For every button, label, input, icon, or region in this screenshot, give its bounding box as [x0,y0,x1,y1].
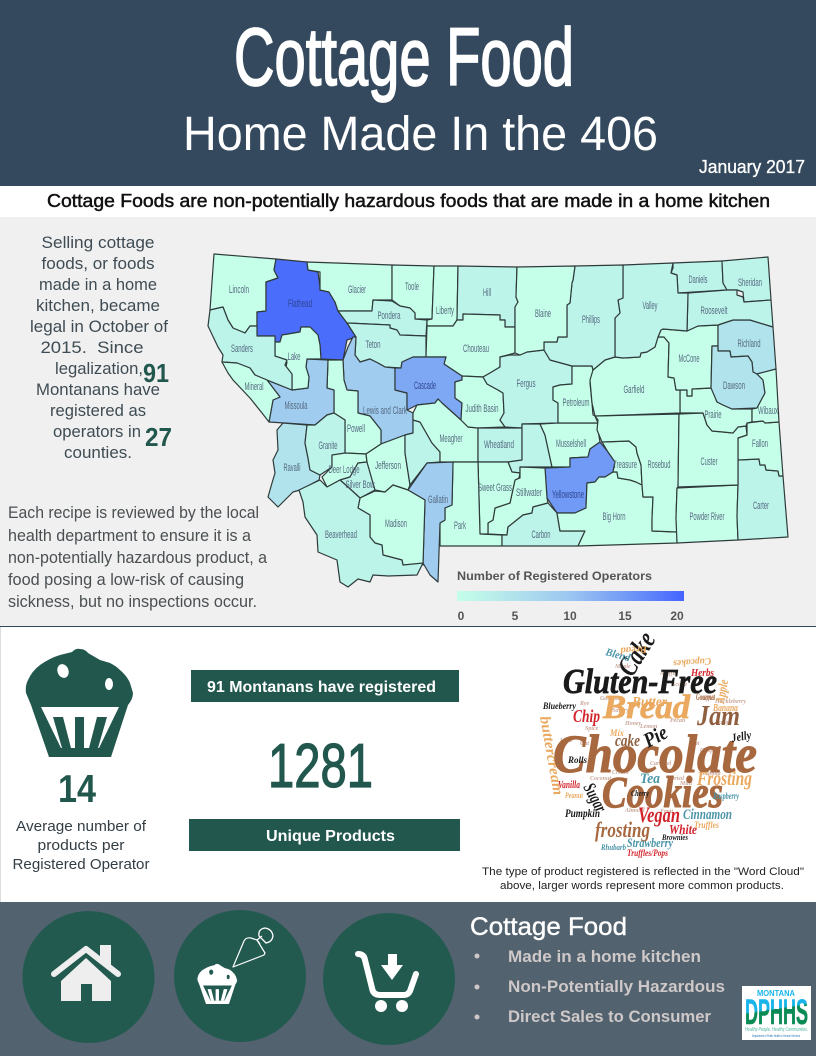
county labels: Big Horn [602,511,626,523]
word cloud: Cinnamon [683,807,732,823]
word cloud: Maple [614,664,631,670]
county labels: McCone [678,353,700,365]
map legend: 20 [670,609,684,623]
word cloud: Rhubarb [600,843,626,852]
word cloud: Raspberry [712,791,740,801]
word cloud: Cupcakes [673,655,712,669]
county labels: Madison [385,518,407,530]
caption: average products: Registered Operator [12,857,150,873]
word cloud: Scone [672,682,687,688]
county labels: Glacier [348,284,366,296]
date: January 2017 [699,157,805,177]
word cloud: cake [615,731,640,750]
caption: average products: Average number of [16,819,147,835]
review text: food posing a low-risk of causing [8,570,244,589]
header banner [0,0,816,186]
county labels: Mineral [244,381,264,393]
county labels: Sheridan [738,277,762,289]
word cloud: Cherry [631,789,649,798]
word cloud: Blueberry [542,701,577,711]
county labels: Judith Basin [466,403,498,415]
stat: 91 operators: 91 [143,358,169,388]
county labels: Toole [405,281,419,293]
map panel [0,217,816,627]
map legend: Number of Registered Operators [457,569,652,583]
word cloud: Butter [631,695,668,710]
word cloud: Strawberry [627,835,673,850]
county labels: Lake [288,351,300,363]
county labels: Hill [483,287,491,299]
footer bullet list: Non-Potentially Hazardous [508,977,725,996]
county labels [229,274,778,541]
word cloud: Rye [579,701,590,707]
footer bullet list [474,947,725,1026]
DPHHS logo [742,986,811,1040]
county labels: Powell [347,423,365,435]
county labels: Petroleum [562,397,590,409]
stat: 14 average products: 14 [58,768,96,811]
caption: average products [12,819,150,873]
word cloud: Peanut [565,791,584,800]
intro text: 2015. Since [40,339,144,357]
map legend: 15 [618,609,632,623]
word cloud: Lime [559,738,573,744]
word cloud: Coconut [590,776,611,782]
word cloud: Crisp [700,748,713,754]
county labels: Gallatin [428,494,448,506]
county labels: Dawson [723,380,745,392]
county labels: Liberty [436,305,454,317]
county labels: Ravalli [284,462,300,474]
icon: cupcake and piping bag circle [174,910,306,1042]
stat: 27 counties: 27 [145,422,172,452]
county labels: Carter [753,500,769,512]
word cloud: Savory [612,708,629,714]
word cloud: Gourmet [696,692,715,702]
county labels: Silver Bow [346,479,375,491]
word cloud: Jelly [729,728,753,745]
county labels: Sanders [231,343,253,355]
county labels: Beaverhead [325,529,357,541]
DPHHS logo: MONTANA [757,989,795,998]
banner: unique products [189,819,460,851]
intro text: legal in October of [30,318,168,336]
county labels: Fallon [752,438,768,450]
word cloud: Banana [712,703,738,714]
word cloud: Muffin [659,671,678,677]
footer heading: Cottage Food [470,913,627,941]
intro text: foods, or foods [42,255,154,273]
word cloud: Herbs [690,667,714,679]
county labels: Park [454,520,466,532]
word cloud: Mix [609,728,624,738]
word cloud: Cake [612,626,662,682]
county labels: Flathead [288,298,312,310]
word cloud: Granola [700,771,721,777]
icon: home circle [22,911,154,1043]
footer bullet list: Direct Sales to Consumer [508,1007,711,1026]
banner: unique products: Unique Products [266,828,395,845]
intro text: operators in [53,423,141,441]
subtitle: Home Made In the 406 [183,108,658,161]
county labels: Custer [700,456,718,468]
intro text: kitchen, became [36,297,160,315]
intro text [30,234,168,462]
review text [8,503,268,611]
intro text: Montanans have [36,381,160,399]
county labels: Prairie [704,409,722,421]
word cloud: Gluten-Free [563,662,717,701]
county labels: Pondera [378,310,401,322]
word cloud: Frosting [696,768,752,790]
word cloud: Chocolate [553,724,757,784]
county labels: Fergus [516,378,536,390]
county labels: Lewis and Clark [363,405,407,417]
word cloud: Pie [638,720,672,753]
intro text: Selling cottage [42,234,154,252]
word cloud: Apple [712,678,731,705]
title: Cottage Food [234,12,574,103]
county labels: Musselshell [556,438,586,450]
icon: shopping cart circle [323,913,455,1045]
word cloud: Truffles/Pops [627,848,668,858]
word cloud: Rolls [567,755,587,765]
county labels: Phillips [582,314,600,326]
word cloud: Fudge [715,720,731,726]
review text: Each recipe is reviewed by the local [8,503,259,522]
statistics panel [0,626,816,902]
county labels: Treasure [613,459,637,471]
word cloud: Tea [640,771,660,787]
word cloud: Truffles [694,820,719,830]
word cloud: Mint [679,781,692,787]
word cloud: Blend [603,646,632,664]
word cloud caption: The type of product registered is reflected in the "Word Cloud" [482,866,804,878]
word cloud: Huckleberry [714,699,746,705]
stat: 1281 products: 1281 [268,732,373,801]
county labels: Carbon [532,529,550,541]
county labels: Valley [642,300,658,312]
review text: sickness, but no inspections occur. [8,592,257,611]
word cloud [536,626,757,858]
county labels: Stillwater [516,487,542,499]
word cloud: Pumpkin [565,806,600,820]
word cloud: Gourmet [600,696,622,702]
county labels: Sweet Grass [478,482,512,494]
word cloud: Almond [624,808,646,814]
word cloud: Brownies [661,833,688,842]
county labels: Wheatland [484,439,514,451]
caption: average products: products per [38,838,125,854]
county labels: Lincoln [229,284,249,296]
review text: non-potentially hazardous product, a [8,548,268,567]
word cloud: Cream [612,770,629,776]
choropleth map of Montana counties [208,254,788,587]
word cloud: Jam [696,701,740,732]
banner: 91 Montanans: 91 Montanans have registered [207,679,436,696]
county labels: Wibaux [758,405,778,417]
county labels: Meagher [440,433,463,445]
county labels: Roosevelt [700,305,728,317]
word cloud: Oat [580,741,589,747]
county labels: Chouteau [463,343,489,355]
intro text: legalization, [55,360,143,378]
word cloud caption [482,866,804,892]
word cloud: Vanilla [558,780,580,791]
footer panel [0,902,816,1056]
map legend [457,569,684,623]
word cloud: Lemon [639,724,658,730]
word cloud: Honey [624,721,642,727]
word cloud: Spice [585,726,599,732]
banner: 91 Montanans [191,670,459,702]
word cloud: Nut [689,741,700,747]
word cloud: Chip [573,706,600,726]
word cloud: Pecan [670,718,686,724]
word cloud caption: above, larger words represent more common products. [500,880,784,892]
word cloud: frosting [595,817,650,842]
county labels: Missoula [284,400,308,412]
word cloud: Bread [619,643,649,656]
word cloud: Cookies [602,768,723,817]
county labels: Daniels [688,274,708,286]
word cloud: Vegan [638,802,680,827]
review text: health department to ensure it is a [8,526,252,545]
county labels: Granite [318,440,338,452]
intro text: registered as [50,402,146,420]
county labels: Deer Lodge [328,464,360,476]
county labels: Richland [738,338,760,350]
county labels: Rosebud [648,459,670,471]
map legend: 10 [563,609,577,623]
county labels: Blaine [535,308,551,320]
county labels: Powder River [690,511,725,523]
county labels: Cascade [414,380,436,392]
word cloud: buttercream [536,715,566,796]
definition strip: Cottage Foods are non-potentially hazardous foods that are made in a home kitchen [47,191,770,211]
icon: muffin [26,649,133,757]
map legend: 5 [512,609,519,623]
word cloud: Toffee [700,696,716,702]
map legend: 0 [458,609,465,623]
word cloud: Fruit [660,809,673,815]
word cloud: Caramel [650,761,672,767]
word cloud: Dried [669,776,685,782]
word cloud: White [669,823,697,838]
county labels: Teton [366,339,380,351]
word cloud: Bread [602,689,691,726]
intro text: made in a home [39,276,157,294]
footer bullet list: Made in a home kitchen [508,947,701,966]
word cloud: Sugar [579,779,612,816]
county labels: Jefferson [375,460,401,472]
intro text: counties. [64,444,132,462]
county labels: Garfield [624,384,644,396]
county labels: Yellowstone [552,489,584,501]
definition strip [0,186,816,217]
